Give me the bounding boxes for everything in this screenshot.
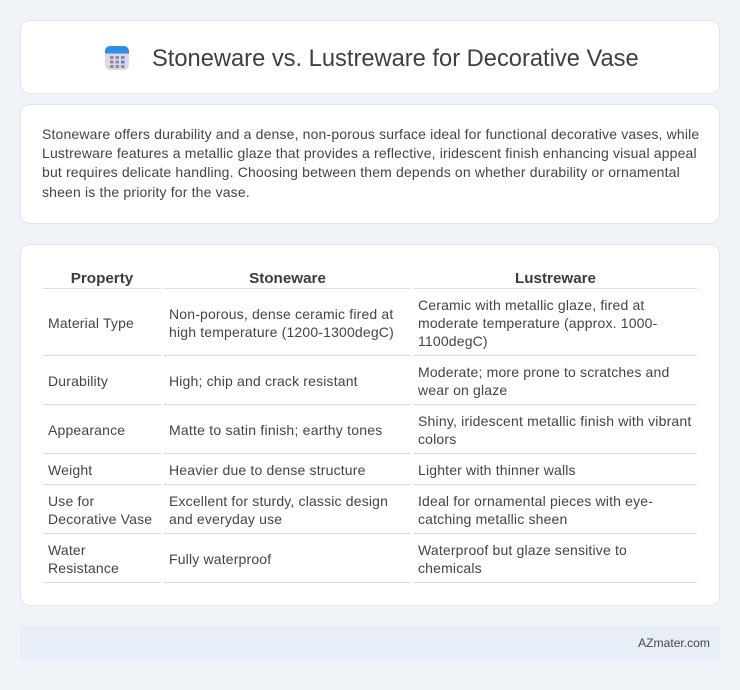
comparison table: Matte to satin finish; earthy tones: [169, 422, 382, 438]
comparison table: colors: [418, 431, 456, 447]
column headers: [71, 270, 596, 287]
comparison table: high temperature (1200-1300degC): [169, 324, 394, 340]
header card: [20, 20, 720, 94]
comparison table: High; chip and crack resistant: [169, 373, 358, 389]
comparison table: catching metallic sheen: [418, 511, 567, 527]
row: durability: Durability: [48, 373, 108, 389]
intro text: Lustreware features a metallic glaze that provides a reflective, iridescent finish enhancing visual appeal: [42, 145, 697, 161]
comparison table: Moderate; more prone to scratches and: [418, 364, 669, 380]
comparison table: and everyday use: [169, 511, 282, 527]
intro text: [42, 126, 699, 200]
row: appearance: Appearance: [48, 422, 125, 438]
comparison table: Resistance: [48, 560, 119, 576]
title: Stoneware vs. Lustreware for Decorative Vase: [152, 46, 639, 72]
comparison table: 1100degC): [418, 333, 488, 349]
row: use for decorative vase: Use for: [48, 493, 94, 509]
footer text: AZmater.com: [638, 636, 710, 650]
comparison table: Lighter with thinner walls: [418, 462, 576, 478]
icon: calendar: [105, 46, 129, 70]
comparison table: Stoneware: [249, 270, 326, 287]
footer bar: [20, 626, 720, 660]
intro text: Stoneware offers durability and a dense, non-porous surface ideal for functional decorative vases, while: [42, 126, 699, 142]
intro card: [20, 104, 720, 224]
comparison table: Fully waterproof: [169, 551, 271, 567]
comparison table: moderate temperature (approx. 1000-: [418, 315, 657, 331]
comparison table: Excellent for sturdy, classic design: [169, 493, 388, 509]
comparison table: Shiny, iridescent metallic finish with vibrant: [418, 413, 692, 429]
table card: [20, 244, 720, 606]
intro text: but requires delicate handling. Choosing between them depends on whether durability or ornamental: [42, 164, 680, 180]
comparison table: chemicals: [418, 560, 482, 576]
comparison table: [43, 270, 697, 583]
comparison table: Heavier due to dense structure: [169, 462, 366, 478]
comparison table: Property: [71, 270, 133, 287]
comparison table: Non-porous, dense ceramic fired at: [169, 306, 393, 322]
row: weight: Weight: [48, 462, 92, 478]
comparison table: wear on glaze: [418, 382, 507, 398]
comparison table: Lustreware: [515, 270, 596, 287]
row: water resistance: Water: [48, 542, 86, 558]
comparison table: Ceramic with metallic glaze, fired at: [418, 297, 644, 313]
comparison table: Decorative Vase: [48, 511, 152, 527]
row: material type: Material Type: [48, 315, 134, 331]
comparison table: Waterproof but glaze sensitive to: [418, 542, 627, 558]
intro text: sheen is the priority for the vase.: [42, 184, 250, 200]
comparison table: Ideal for ornamental pieces with eye-: [418, 493, 653, 509]
